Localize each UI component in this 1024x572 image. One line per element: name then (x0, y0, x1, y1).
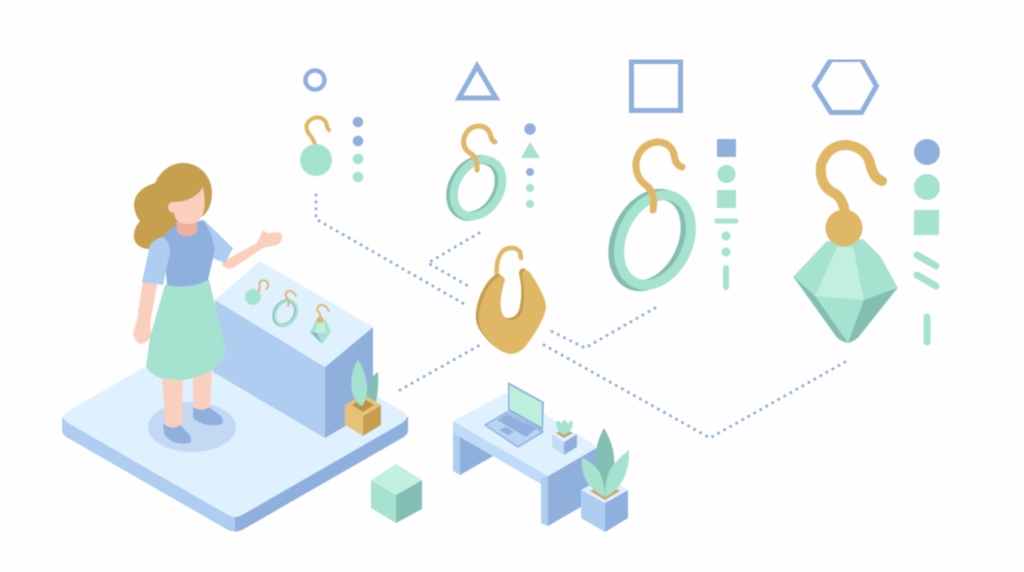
outline shape: hexagon (814, 60, 876, 112)
skirt (146, 280, 226, 380)
legend dots 1 (353, 117, 363, 182)
green cube (371, 464, 422, 523)
legend icons 2 (521, 123, 540, 208)
left sleeve (142, 237, 170, 285)
mini earrings on block (245, 280, 331, 344)
plant on platform (345, 360, 381, 436)
desk (453, 392, 598, 526)
outline shape: circle (306, 70, 324, 90)
central gold earring (476, 248, 546, 354)
earring 3: large hoop (600, 142, 705, 297)
legend icons 4 (914, 139, 940, 342)
bodice (163, 220, 215, 287)
laptop (485, 382, 544, 447)
right arm (222, 230, 282, 269)
outline shape: square (632, 62, 680, 110)
earring 1: round drop (300, 117, 332, 176)
floor shadow (148, 402, 236, 452)
shoes (163, 407, 223, 444)
hair (134, 163, 212, 249)
outline shape: triangle (459, 66, 496, 98)
left arm (133, 280, 158, 344)
dotted connector lines (316, 195, 845, 438)
display block (213, 261, 373, 438)
right sleeve (204, 220, 233, 263)
earring 2: small hoop (441, 126, 512, 225)
woman figure (133, 163, 282, 452)
earring 4: faceted gem drop (794, 145, 897, 343)
legs (162, 370, 212, 428)
big floor plant (581, 428, 629, 532)
face (168, 187, 204, 224)
legend icons 3 (717, 139, 736, 287)
neck (176, 222, 197, 236)
small desk plant (552, 420, 577, 455)
platform (62, 318, 408, 532)
